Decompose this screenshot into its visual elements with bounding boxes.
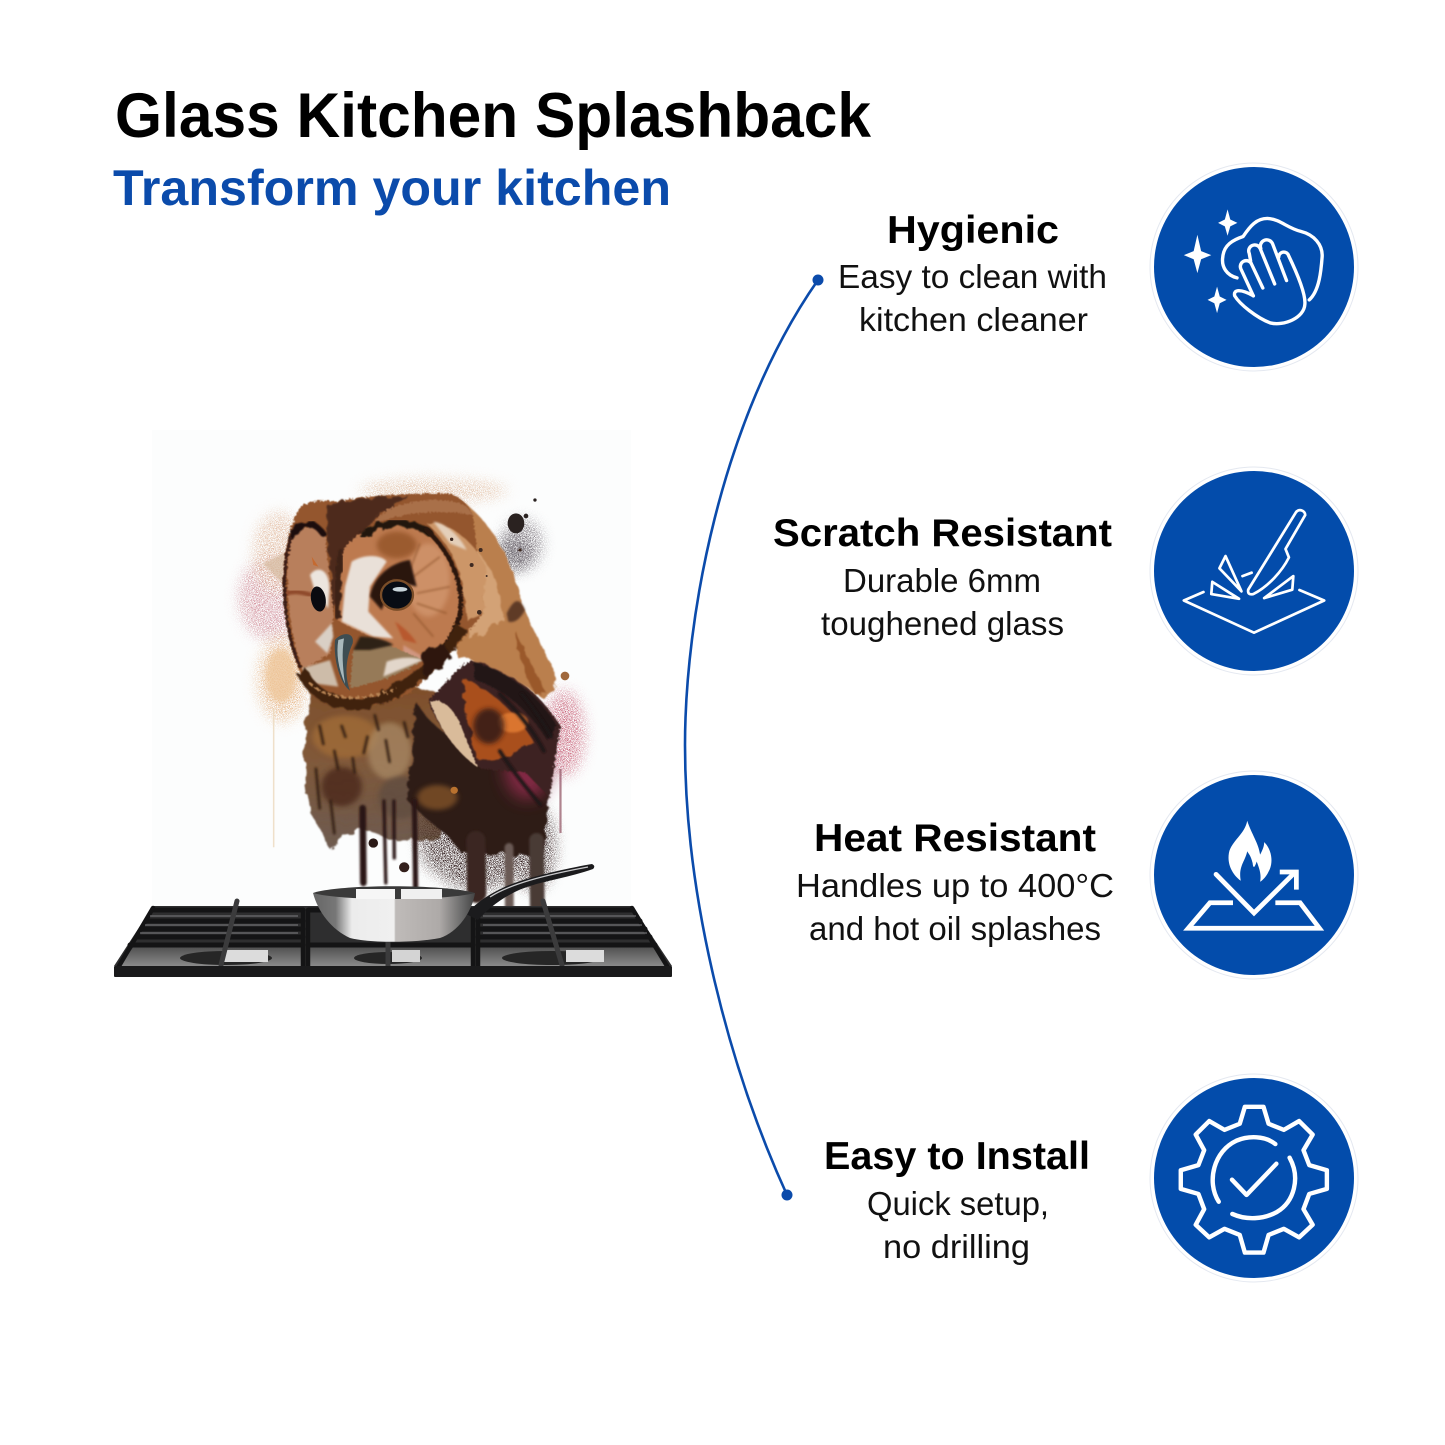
drips: [363, 801, 537, 910]
feature text: hygienic: kitchen cleaner: [859, 301, 1088, 338]
feature text: easy to install: Easy to Install: [824, 1135, 1090, 1178]
crown: [327, 497, 410, 613]
lower dark body: [408, 701, 549, 858]
left eye: [309, 585, 328, 613]
icon: hand wiping with sparkles: [1150, 163, 1358, 371]
feature text: heat resistant: Heat Resistant: [814, 817, 1096, 860]
beak: [335, 634, 353, 691]
feature text: scratch resistant: toughened glass: [821, 605, 1064, 642]
hob surface: [114, 906, 672, 966]
grey splatter: [493, 537, 530, 573]
front edge: [114, 966, 672, 977]
frying pan: [313, 864, 594, 942]
subtitle: Transform your kitchen: [113, 160, 671, 216]
feature text: scratch resistant: [773, 512, 1112, 642]
feature text: hygienic: Hygienic: [887, 209, 1059, 252]
feature text: scratch resistant: Durable 6mm: [843, 562, 1041, 599]
icon: knife scratching glass: [1150, 467, 1358, 675]
icon: gear with checkmark: [1150, 1074, 1358, 1282]
right facial disc: [337, 523, 460, 662]
handle: [466, 864, 594, 920]
title: Glass Kitchen Splashback: [115, 81, 872, 151]
wing: [428, 658, 560, 797]
feature text: heat resistant: [796, 817, 1114, 947]
feature text: easy to install: Quick setup,: [867, 1185, 1049, 1222]
white brow: [342, 556, 393, 638]
shoulder upper: [443, 500, 557, 698]
feature text: scratch resistant: Scratch Resistant: [773, 512, 1112, 555]
feature text: hygienic: [838, 209, 1107, 338]
connector dot top: [812, 274, 824, 286]
lower face feathers: [350, 644, 423, 688]
owl head: [283, 493, 569, 706]
owl illustration: [239, 479, 584, 910]
facial ruff: [302, 627, 462, 704]
grate bars: [119, 908, 667, 966]
burners: [180, 950, 604, 965]
connector dot bottom: [782, 1190, 792, 1200]
feature text: heat resistant: and hot oil splashes: [809, 910, 1101, 947]
pan rim: [313, 886, 475, 899]
right eye: [381, 580, 413, 610]
head base: [283, 493, 483, 706]
connector curve: [685, 274, 824, 1200]
icon: flame over surface: [1150, 771, 1358, 979]
eye shadow: [370, 560, 417, 610]
glass panel: [152, 430, 631, 906]
ink spots: [450, 498, 569, 680]
feature text: heat resistant: Handles up to 400°C: [796, 867, 1114, 904]
owl body: [230, 470, 595, 906]
ring strokes: [285, 523, 461, 667]
feature text: easy to install: no drilling: [883, 1228, 1030, 1265]
feature text: easy to install: [824, 1135, 1090, 1265]
left facial disc: [287, 526, 333, 670]
gas hob: [114, 901, 672, 977]
chest: [305, 673, 463, 849]
pan body: [313, 893, 475, 942]
feature text: hygienic: Easy to clean with: [838, 258, 1107, 295]
burner wells: [120, 946, 303, 966]
paint splatter: [239, 479, 584, 890]
